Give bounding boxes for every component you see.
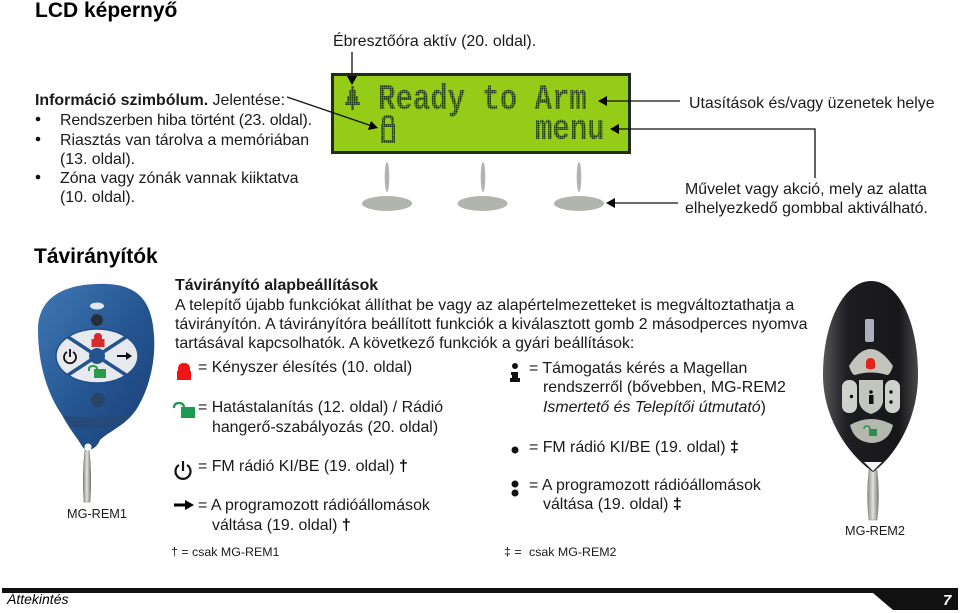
arrow button [117, 352, 132, 360]
LED window [865, 319, 874, 342]
lock button [92, 333, 104, 347]
caption: MG-REM2: MG-REM2 [845, 524, 905, 538]
legend: green unlock [174, 399, 443, 436]
note: MG-REM2 only: csak MG-REM2 [529, 545, 617, 559]
center info button [859, 380, 883, 414]
arrow: alarm symbol [347, 52, 357, 85]
arrow: messages [598, 96, 680, 106]
LCD lock symbol [381, 115, 395, 143]
text block: information symbol: Információ szimbólum. Jelentése: [35, 92, 285, 109]
power button [64, 349, 76, 363]
note: MG-REM2 only: ‡ = [504, 545, 522, 559]
arrow: soft key [606, 198, 678, 208]
button cluster [56, 329, 138, 383]
icon: unlock [174, 403, 195, 418]
unlock button [89, 366, 97, 371]
lock button [849, 349, 893, 375]
text block: remote defaults [175, 277, 808, 352]
legend: info: Ismertető és Telepítői útmutató) [543, 399, 766, 416]
icon: lock [177, 363, 191, 380]
label: action: Művelet vagy akció, mely az alatta [685, 181, 927, 198]
legend: arrow: váltása (19. oldal) † [212, 517, 351, 534]
label: messages: Utasítások és/vagy üzenetek helye [689, 95, 935, 112]
arrow: menu [610, 124, 815, 178]
left button [842, 380, 857, 413]
label: action: elhelyezkedő gombbal aktiválható. [685, 200, 928, 217]
text block: information symbol [35, 92, 312, 206]
heading: remote controls: Távirányítók [34, 245, 158, 268]
LCD second line: menu [535, 109, 605, 150]
text block: information symbol: Zóna vagy zónák vannak kiiktatva [60, 170, 299, 187]
text block: remote defaults: távirányítón. A távirányítóra beállított funkciók a kiválasztott gomb 2 másodperces nyomva [175, 316, 808, 333]
legend: two dots: = A programozott rádióállomások [529, 477, 761, 494]
remote: MG-REM1 [38, 284, 154, 502]
label: action [685, 181, 928, 217]
footer: section name: Áttekintés [6, 591, 68, 607]
label: alarm clock active: Ébresztőóra aktív (20. oldal). [333, 31, 536, 50]
legend: arrow: = A programozott rádióállomások [198, 497, 430, 514]
text block: information symbol: (13. oldal). [60, 151, 135, 168]
caption: MG-REM1: MG-REM1 [67, 507, 127, 521]
icon: two dots [512, 480, 518, 496]
key ring [83, 450, 91, 502]
text block: remote defaults: A telepítő újabb funkciókat állíthat be vagy az alapértelmezetteket is megváltoztathatja a [175, 297, 794, 314]
footer: page number: 7 [943, 592, 952, 609]
text block: information symbol: Riasztás van tárolva a memóriában [60, 132, 309, 149]
LCD display [332, 74, 630, 152]
icon: arrow [174, 500, 194, 510]
legend: info: = Támogatás kérés a Magellan [529, 360, 747, 377]
icon: info [510, 363, 520, 382]
legend: power: = FM rádió KI/BE (19. oldal) † [198, 458, 408, 475]
remote: MG-REM2 [823, 281, 918, 520]
icon: power [176, 461, 190, 479]
text block: remote defaults: Távirányító alapbeállítások [175, 277, 378, 294]
text block: remote defaults: tartásával kapcsolhatók. A következő funkciók a gyári beállítások: [175, 335, 634, 352]
icon: dot [512, 446, 518, 454]
note: MG-REM1 only: † = csak MG-REM1 [171, 545, 280, 559]
legend: green unlock: hangerő-szabályozás (20. oldal) [212, 419, 438, 436]
LCD bell symbol [345, 86, 360, 110]
right button [885, 380, 900, 413]
remote body [823, 281, 918, 472]
key ring [868, 470, 878, 520]
legend: one dot: = FM rádió KI/BE (19. oldal) ‡ [529, 439, 739, 456]
unlock button [850, 419, 893, 443]
footer [2, 588, 958, 610]
legend: green unlock: = Hatástalanítás (12. oldal) / Rádió [198, 399, 443, 416]
text block: information symbol: Rendszerben hiba történt (23. oldal). [60, 112, 312, 129]
arrow: information symbol [287, 97, 378, 130]
remote body [38, 284, 154, 450]
legend: two dots: váltása (19. oldal) ‡ [543, 496, 682, 513]
legend: two dots [512, 477, 761, 513]
legend: arrow [174, 497, 430, 534]
text block: information symbol: (10. oldal). [60, 189, 135, 206]
LCD soft keys [362, 162, 604, 211]
legend: info: rendszerről (bővebben, MG-REM2 [543, 379, 786, 396]
LCD first line: Ready to Arm [378, 79, 587, 120]
legend: info [510, 360, 786, 416]
legend: red lock: = Kényszer élesítés (10. oldal) [198, 359, 412, 376]
